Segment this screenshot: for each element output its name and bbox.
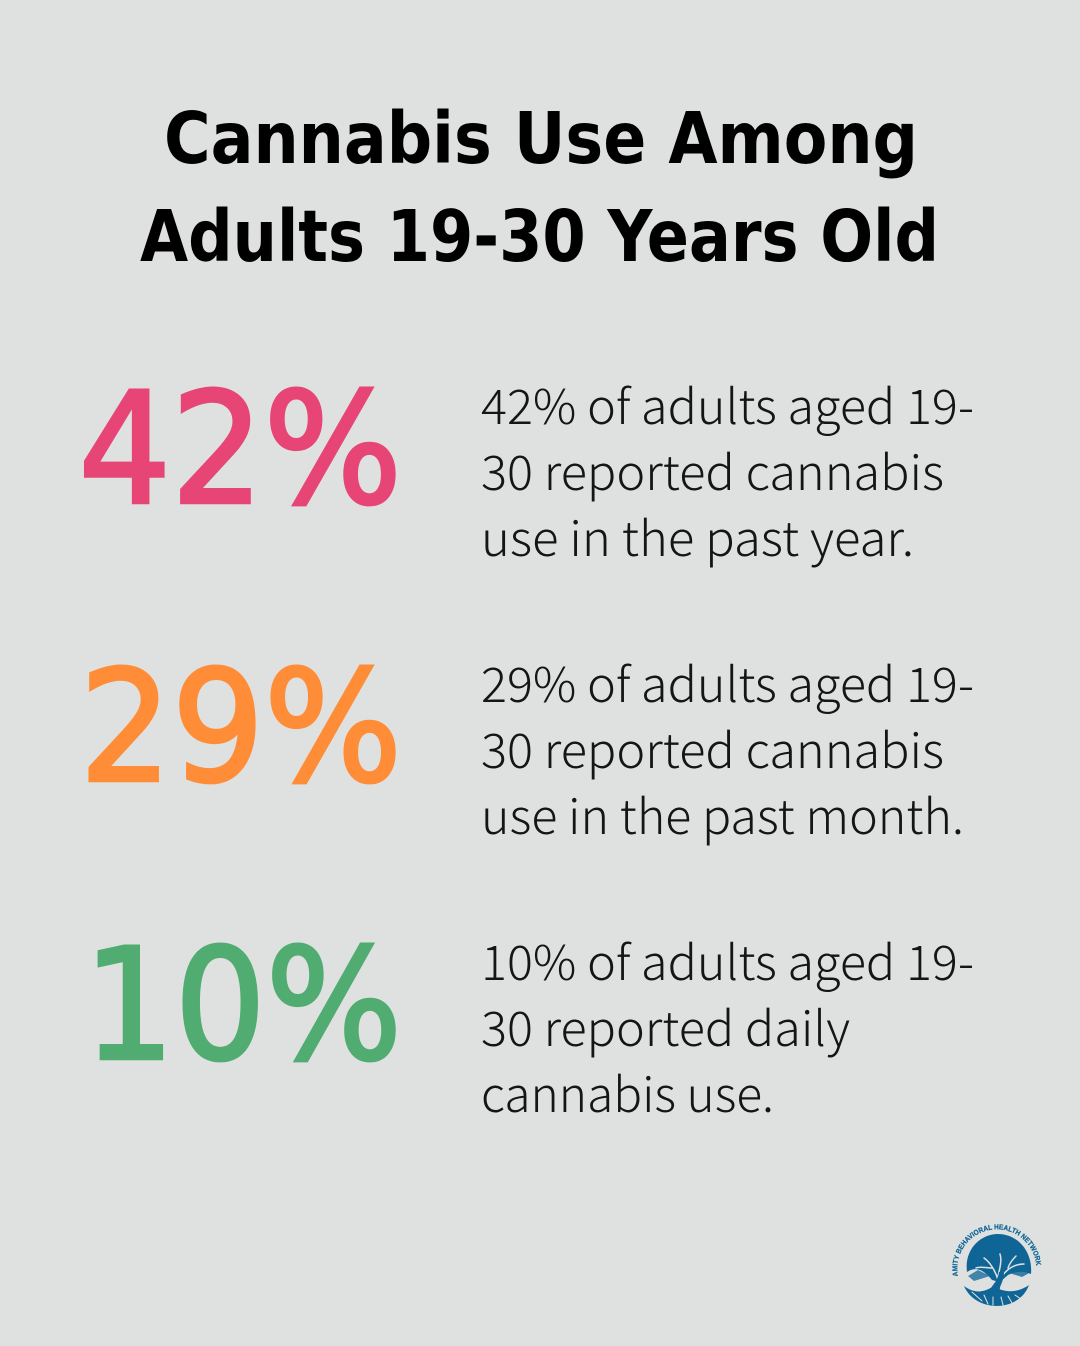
stat: 10%: 10%	[84, 916, 402, 1096]
panel: 29% past month	[80, 638, 974, 848]
stat: 29%: 29%	[80, 638, 402, 818]
title	[140, 97, 939, 278]
title: Cannabis Use Among	[164, 97, 918, 180]
text: 10% description: cannabis use.	[481, 1056, 774, 1126]
text: 29% description: use in the past month.	[481, 778, 964, 848]
text: 29% description	[481, 646, 974, 848]
text: 42% description: 30 reported cannabis	[481, 434, 944, 504]
icon: Amity Behavioral Health Network logo: AMITY BEHAVIORAL HEALTH NETWORK	[952, 1224, 1042, 1276]
icon: Amity Behavioral Health Network logo	[952, 1224, 1042, 1306]
text: 29% description: 30 reported cannabis	[481, 712, 944, 782]
text: 10% description	[481, 924, 974, 1126]
title: Adults 19-30 Years Old	[140, 195, 939, 278]
panel: 10% daily	[84, 916, 974, 1126]
panel: 42% past year	[78, 360, 974, 570]
text: 42% description: 42% of adults aged 19-	[481, 368, 974, 438]
text: 10% description: 10% of adults aged 19-	[481, 924, 974, 994]
text: 29% description: 29% of adults aged 19-	[481, 646, 974, 716]
text: 42% description	[481, 368, 974, 570]
stat: 42%: 42%	[78, 360, 402, 540]
text: 10% description: 30 reported daily	[481, 990, 850, 1060]
text: 42% description: use in the past year.	[481, 500, 914, 570]
